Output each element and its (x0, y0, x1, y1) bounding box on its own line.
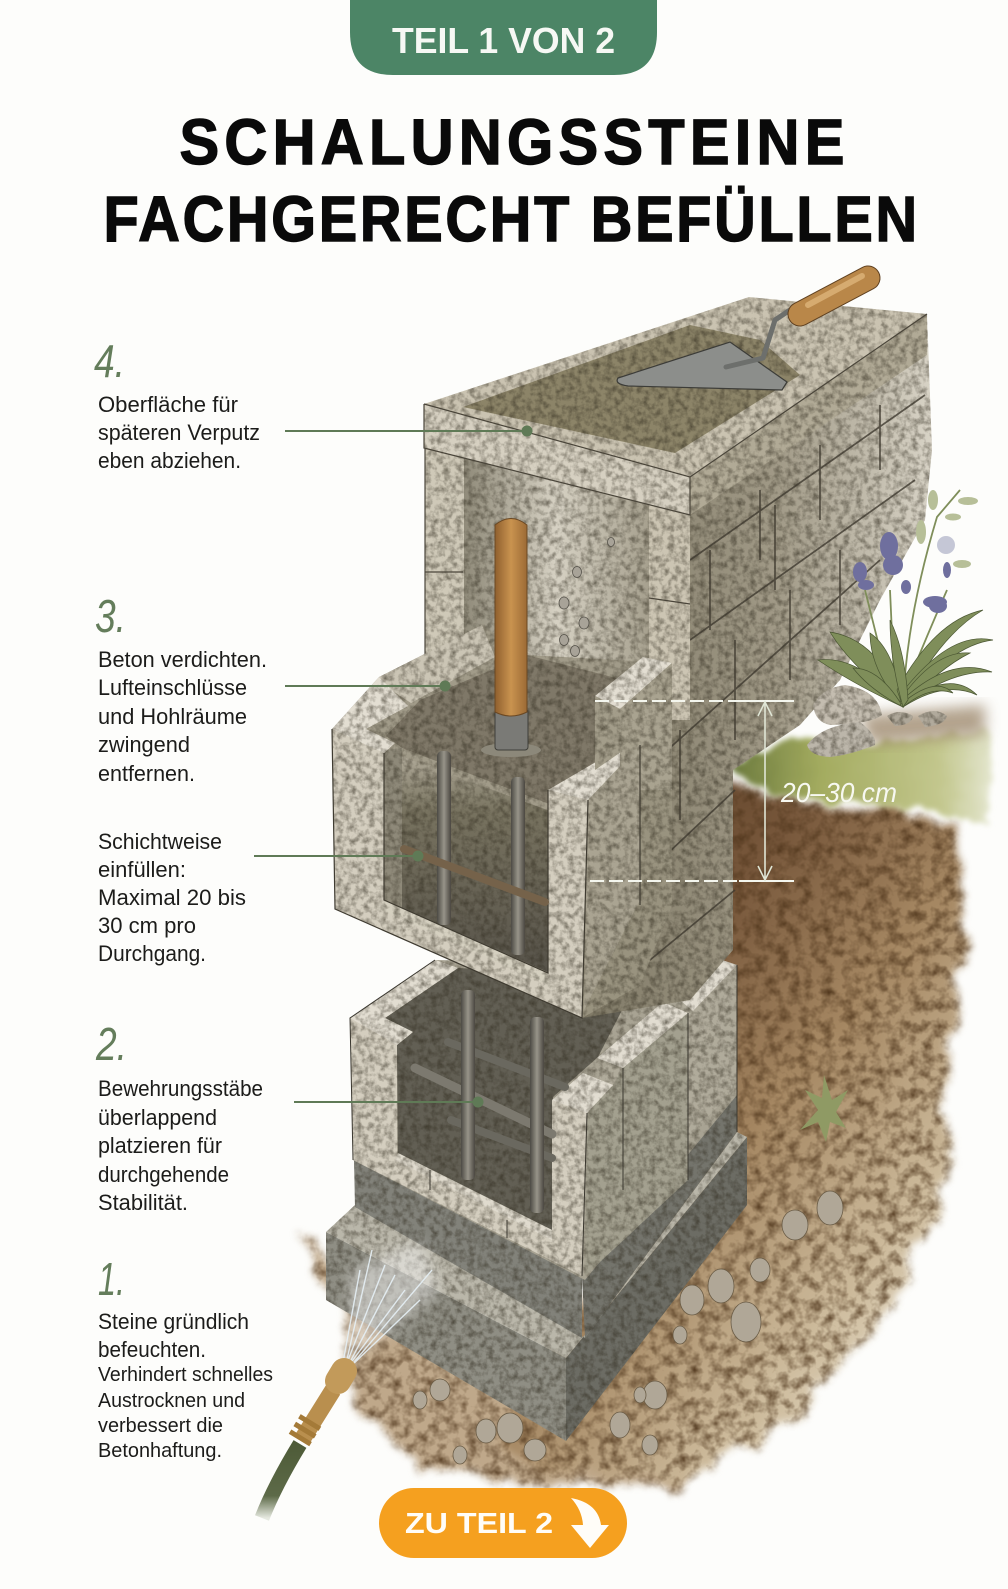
step 3 text: Beton verdichten. (98, 647, 267, 672)
step 2 text: 2. (95, 1018, 127, 1070)
step 1 text: Verhindert schnelles (98, 1364, 273, 1386)
step 3 text: und Hohlräume (98, 704, 247, 729)
top cap block (424, 297, 927, 515)
step 4 text: 4. (94, 335, 125, 387)
step 3 text: zwingend (98, 732, 190, 757)
water spray (342, 1240, 440, 1368)
wall side face with block courses (582, 314, 932, 1018)
step 1 text: Betonhaftung. (98, 1440, 222, 1462)
step 2 text: Bewehrungsstäbe (98, 1076, 263, 1101)
vibrating rod in concrete (481, 518, 541, 757)
step 4 text: Oberfläche für (98, 392, 238, 417)
rear horizontal rebars (448, 1042, 565, 1158)
button: zu Teil 2: ZU TEIL 2 (405, 1508, 553, 1540)
step 2 text: durchgehende (98, 1162, 229, 1187)
front horizontal rebar (415, 1068, 552, 1134)
step 4 text: eben abziehen. (98, 448, 241, 473)
step 2 text: Stabilität. (98, 1190, 188, 1215)
lower block: wet course (354, 1087, 737, 1338)
soil pebbles (413, 1191, 843, 1464)
button: zu Teil 2 (379, 1488, 627, 1558)
title: FACHGERECHT BEFÜLLEN (104, 183, 917, 255)
layered filling text: Schichtweise (98, 829, 222, 854)
icon: down arrow (571, 1498, 609, 1548)
grass and plant bed (725, 705, 995, 825)
plant with lavender (818, 490, 993, 707)
small weed in soil (800, 1075, 848, 1142)
footing (326, 1132, 747, 1441)
step 2 text: überlappend (98, 1105, 217, 1130)
layered filling text: Maximal 20 bis (98, 885, 246, 910)
step 1 text: 1. (98, 1253, 125, 1305)
leader layered filling (254, 850, 424, 862)
rocks (807, 685, 947, 757)
step 2 text: platzieren für (98, 1133, 222, 1158)
leader step 4 (285, 426, 532, 436)
trowel (617, 276, 868, 390)
step 3 text: Lufteinschlüsse (98, 675, 247, 700)
label pill: Teil 1 von 2 (350, 0, 657, 75)
title: SCHALUNGSSTEINE (179, 107, 844, 178)
vertical rebars (461, 990, 544, 1213)
upper cavity (425, 445, 690, 720)
layered filling text: Durchgang. (98, 941, 206, 966)
step 3 text: entfernen. (98, 761, 195, 786)
step 4 text: späteren Verputz (98, 420, 260, 445)
step 3 formwork block (332, 625, 672, 1018)
step 1 text: Austrocknen und (98, 1390, 245, 1412)
layered filling text: 30 cm pro (98, 913, 196, 938)
layered filling text: einfüllen: (98, 857, 186, 882)
step 1 text: Steine gründlich (98, 1309, 249, 1334)
step 3 text (95, 590, 267, 786)
title (104, 107, 917, 255)
dimension 20-30 cm: 20–30 cm (780, 777, 897, 808)
step 3 text: 3. (95, 590, 126, 642)
step 1 text: verbessert die (98, 1415, 223, 1437)
step 3 rebars (404, 751, 545, 955)
soil ground behind the wall (295, 765, 965, 1492)
garden hose with brass nozzle (262, 1371, 344, 1518)
label pill: Teil 1 von 2: TEIL 1 VON 2 (392, 20, 615, 61)
step 2 text (95, 1018, 263, 1215)
step 4 text (94, 335, 260, 473)
leader step 2 (294, 1096, 484, 1108)
leader step 3 (285, 680, 450, 692)
step 1 text (98, 1253, 273, 1462)
air bubbles (559, 538, 614, 656)
dimension 20-30 cm (590, 701, 897, 881)
step 1 text: befeuchten. (98, 1337, 206, 1362)
layered filling text (98, 829, 246, 966)
step 2 formwork block with rebars (350, 955, 737, 1280)
